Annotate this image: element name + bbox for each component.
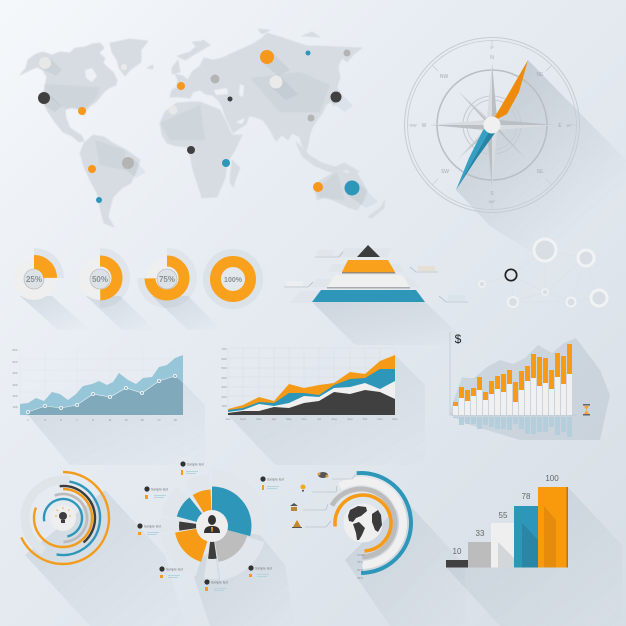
bars	[453, 374, 572, 415]
pyramid tier: orange	[342, 260, 396, 274]
donut: 100%	[203, 249, 263, 309]
pie labels: Sample text	[166, 568, 183, 572]
stacked area chart	[221, 347, 425, 465]
compass direction labels: SE	[537, 169, 544, 175]
pyramid shadow	[312, 302, 470, 345]
pie chart shadow	[190, 525, 295, 626]
area chart axis labels: 100	[12, 405, 18, 409]
bar: 100: 100	[545, 474, 559, 483]
bar: 10	[446, 547, 476, 568]
compass direction labels: NE	[537, 72, 544, 78]
compass	[404, 38, 626, 270]
compass long shadow	[456, 60, 626, 270]
compass direction labels: SW	[441, 169, 449, 175]
globe	[344, 504, 382, 542]
area chart lower series	[28, 376, 183, 415]
stacked chart axis labels: Oct	[363, 417, 367, 421]
stacked chart axis labels: 300	[221, 385, 227, 389]
compass direction labels: 180°	[488, 200, 496, 204]
stacked chart axis labels: 600	[221, 357, 227, 361]
stacked chart axis labels: Sep	[347, 417, 353, 421]
pie labels: Sample text	[187, 462, 204, 466]
stacked chart axis labels: 500	[221, 366, 227, 370]
map markers	[38, 50, 378, 208]
pie labels: Sample text	[267, 478, 284, 482]
compass dial rings	[404, 38, 580, 212]
stacked chart axis labels: May	[286, 417, 292, 421]
stacked chart axis labels: Aug	[331, 417, 337, 421]
pie labels: Sample text	[255, 566, 272, 570]
stacked chart axis labels: 700	[221, 347, 227, 351]
pie sectors	[176, 490, 248, 562]
bar: 55	[491, 511, 522, 568]
icon: hourglass	[583, 404, 590, 416]
compass direction labels: 0°	[490, 46, 494, 50]
icon: light bulb	[55, 507, 71, 523]
compass direction labels: NW	[440, 74, 448, 80]
area chart axis labels: 600	[12, 348, 18, 352]
donut: 25%: 25%	[26, 275, 42, 284]
pie center	[196, 510, 228, 542]
pyramid tier: black	[357, 245, 380, 257]
stacked series: blue	[228, 369, 395, 415]
pie labels	[137, 461, 284, 591]
area chart upper series	[20, 355, 183, 415]
pie labels: Sample text	[211, 580, 228, 584]
area chart axis labels: 400	[12, 371, 18, 375]
stacked chart axis labels: Apr	[272, 417, 276, 421]
area chart axis labels: 13	[124, 418, 128, 422]
area chart axis labels: 200	[12, 394, 18, 398]
compass star	[430, 63, 554, 187]
bar: 33: 33	[476, 529, 485, 538]
area chart axis labels: 11	[108, 418, 112, 422]
compass direction labels: S	[490, 191, 494, 197]
stacked chart axis labels	[221, 347, 398, 421]
pie labels: Sample text	[144, 524, 161, 528]
globe arc chart	[290, 466, 465, 626]
icon: person	[204, 515, 220, 533]
donut: 25%	[18, 248, 90, 330]
stacked chart axis labels: Mar	[256, 417, 262, 421]
ring chart pale band	[11, 466, 115, 570]
stacked chart axis labels: Dec	[392, 417, 398, 421]
compass direction labels: N	[490, 55, 494, 61]
bar: 100	[538, 474, 568, 568]
donut: 50%	[83, 248, 155, 330]
ring chart shadow	[25, 490, 185, 626]
stacked series: orange	[228, 355, 395, 415]
world map	[20, 29, 385, 227]
globe chart arcs	[304, 466, 418, 580]
globe percentage labels: 75%	[357, 560, 363, 564]
stacked chart axis labels: 100	[221, 404, 227, 408]
bar: 55: 55	[499, 511, 508, 520]
compass direction labels: E	[558, 123, 562, 129]
compass direction labels: W	[422, 123, 427, 129]
stacked chart axis labels: Jul	[317, 417, 321, 421]
globe callouts	[303, 473, 357, 527]
stacked chart axis labels: 400	[221, 376, 227, 380]
bar: 33	[468, 529, 498, 568]
area chart with line	[12, 348, 205, 465]
area chart axis labels: 19	[173, 418, 177, 422]
compass direction labels: 270°	[410, 124, 418, 128]
area chart axis labels: 500	[12, 360, 18, 364]
stacked bar chart	[450, 332, 610, 440]
bar: 78	[514, 492, 544, 568]
area chart axis labels: 17	[157, 418, 161, 422]
area chart axis labels: 3	[44, 418, 46, 422]
area chart line with markers	[26, 374, 177, 414]
area chart axis labels: 1	[27, 418, 29, 422]
area chart axis labels: 9	[92, 418, 94, 422]
stacked chart axis labels: 200	[221, 395, 227, 399]
pyramid tier: blue	[312, 290, 425, 302]
area chart axis labels: 300	[12, 383, 18, 387]
stacked chart grid	[228, 348, 395, 415]
dollar sign: $	[455, 332, 462, 346]
stacked chart shadow	[228, 355, 425, 465]
bar reflections	[453, 417, 572, 437]
globe chart shadow	[345, 500, 465, 626]
donut: 100%: 100%	[224, 277, 243, 284]
stacked chart axis labels: Nov	[377, 417, 383, 421]
area chart axis labels: 15	[140, 418, 144, 422]
donut charts	[18, 248, 263, 330]
area chart axis labels	[12, 348, 177, 422]
globe percentage labels	[357, 553, 365, 580]
staircase shadow	[446, 487, 622, 626]
donut: 75%	[137, 248, 222, 330]
donut: 50%: 50%	[92, 275, 108, 284]
area chart shadow	[28, 375, 205, 465]
bar: 78: 78	[522, 492, 531, 501]
ring chart center	[50, 505, 76, 531]
globe percentage labels: 25%	[357, 576, 363, 580]
compass direction labels	[410, 46, 572, 204]
bar chart background area	[450, 338, 610, 440]
compass needle	[456, 60, 528, 190]
area chart grid	[20, 348, 191, 415]
sector pie chart	[137, 461, 295, 626]
area chart axis labels: 5	[60, 418, 62, 422]
bar: 10: 10	[453, 547, 462, 556]
globe percentage labels: 100%	[357, 553, 365, 557]
staircase bar chart	[446, 474, 622, 626]
stacked chart axis labels: Jun	[302, 417, 307, 421]
pyramid	[284, 245, 470, 345]
compass direction labels: 90°	[566, 124, 572, 128]
stacked chart axis labels: Jan	[226, 417, 231, 421]
globe callout icons	[290, 472, 328, 528]
area chart axis labels: 7	[76, 418, 78, 422]
pie labels: Sample text	[151, 488, 168, 492]
pyramid callouts	[284, 250, 468, 302]
stacked series: white	[228, 381, 395, 415]
bar chart axis	[450, 332, 577, 415]
globe percentage labels: 50%	[357, 568, 363, 572]
stacked series: black	[228, 390, 395, 415]
pie pale outer sectors	[165, 479, 259, 573]
stacked chart axis labels: Feb	[240, 417, 246, 421]
concentric ring chart	[11, 466, 185, 626]
pyramid tier: white	[327, 275, 410, 288]
pyramid back plates	[290, 248, 420, 303]
network diagram	[479, 239, 607, 307]
donut: 75%: 75%	[159, 275, 175, 284]
